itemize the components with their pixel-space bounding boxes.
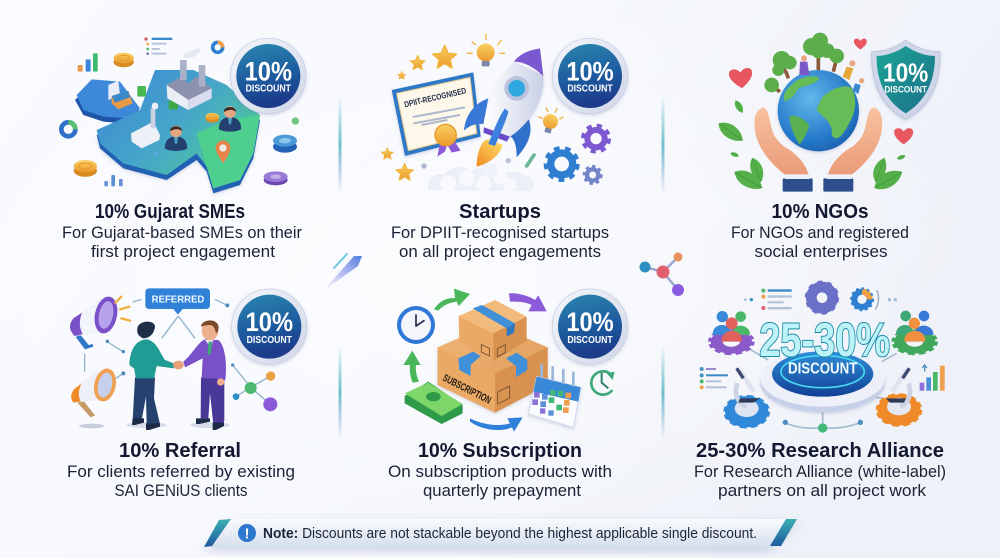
text: NGOs description: social enterprises bbox=[754, 242, 888, 261]
badge: 10% discount: DISCOUNT bbox=[567, 335, 613, 346]
text: Referral description: SAI GENiUS clients bbox=[114, 481, 248, 500]
badge: 10% discount: DISCOUNT bbox=[567, 84, 613, 95]
heading: 10% NGOs: 10% NGOs bbox=[772, 200, 868, 223]
badge: 10% discount: 10% bbox=[566, 307, 614, 337]
badge: 10% discount: DISCOUNT bbox=[246, 84, 291, 95]
badge: 10% discount: 10% bbox=[245, 56, 292, 86]
badge: shield 10% discount: DISCOUNT bbox=[884, 85, 927, 95]
badge: 10% discount: DISCOUNT bbox=[247, 335, 292, 346]
illustration: subscription boxes bbox=[397, 289, 628, 432]
text: Startups description: on all project engagements bbox=[399, 242, 601, 261]
illustration: Gujarat map with factories and people bbox=[61, 37, 306, 193]
badge: 10% discount: 10% bbox=[566, 56, 614, 86]
panel: Subscription bbox=[388, 289, 628, 500]
note bar bbox=[204, 519, 797, 547]
left hand bbox=[754, 108, 809, 175]
text: note: Note: Discounts are not stackable beyond the highest applicable single discount. bbox=[263, 525, 757, 542]
badge: 10% discount bbox=[552, 38, 628, 114]
text: NGOs description: For NGOs and registered bbox=[731, 223, 909, 242]
icon: purple megaphone bbox=[70, 294, 130, 349]
icon: shooting comet bbox=[323, 254, 362, 291]
gear group: purple team bbox=[710, 311, 752, 354]
heading: 10% Subscription: 10% Subscription bbox=[418, 439, 582, 462]
panel: NGOs bbox=[715, 33, 940, 261]
illustration: rocket and certificate bbox=[381, 34, 628, 192]
badge: 10% discount bbox=[231, 38, 306, 114]
badge: 25-30%: 25-30% bbox=[759, 314, 890, 367]
right hand bbox=[828, 108, 882, 175]
text: Subscription description: On subscription products with bbox=[388, 462, 612, 481]
text: Research Alliance description: partners on all project work bbox=[718, 481, 927, 500]
badge: 10% discount bbox=[552, 289, 628, 364]
text: Startups description: For DPIIT-recognised startups bbox=[391, 223, 609, 242]
callout: referred bbox=[145, 288, 210, 315]
text: Gujarat SMEs description: For Gujarat-based SMEs on their bbox=[62, 223, 302, 242]
text: Referral description: For clients referred by existing bbox=[67, 462, 295, 481]
figure: client right bbox=[173, 320, 226, 430]
text: Gujarat SMEs description: first project engagement bbox=[91, 242, 275, 261]
panel: Startups bbox=[381, 34, 628, 261]
badge: shield 10% discount: 10% bbox=[883, 57, 928, 87]
badge: 10% discount: 10% bbox=[246, 307, 293, 337]
callout: referred: REFERRED bbox=[152, 295, 204, 306]
badge: shield 10% discount bbox=[872, 40, 940, 119]
text: Research Alliance description: For Research Alliance (white-label) bbox=[694, 462, 946, 481]
heading: 25-30% Research Alliance: 25-30% Research Alliance bbox=[696, 439, 944, 462]
figure: client left bbox=[129, 322, 174, 430]
illustration: rocket and certificate: DPIIT-RECOGNISED bbox=[403, 85, 467, 109]
icon: molecule connector bbox=[640, 252, 684, 296]
illustration: discount platform with gears and microscopes: DISCOUNT bbox=[788, 360, 858, 377]
gear group: orange microscope bbox=[878, 368, 920, 425]
heading: Startups: Startups bbox=[459, 200, 541, 223]
icon: info bbox=[238, 524, 256, 542]
icon: info: ! bbox=[244, 526, 250, 542]
text: Subscription description: quarterly prepayment bbox=[423, 481, 581, 500]
illustration: discount platform with gears and microscopes bbox=[700, 282, 945, 433]
panel: Research Alliance bbox=[694, 282, 946, 500]
badge: 10% discount bbox=[232, 289, 307, 364]
panel: Gujarat SMEs bbox=[61, 37, 306, 261]
illustration: handshake and megaphones bbox=[70, 288, 307, 430]
panel: Referral bbox=[67, 288, 307, 500]
gear group: green team bbox=[894, 311, 936, 354]
heading: 10% Referral: 10% Referral bbox=[119, 439, 241, 462]
icon: orange megaphone bbox=[71, 366, 119, 417]
gear group: blue microscope bbox=[726, 368, 768, 427]
illustration: subscription boxes: SUBSCRIPTION bbox=[441, 373, 493, 407]
heading: 10% Gujarat SMEs: 10% Gujarat SMEs bbox=[95, 200, 245, 223]
illustration: globe held by hands bbox=[715, 33, 940, 194]
